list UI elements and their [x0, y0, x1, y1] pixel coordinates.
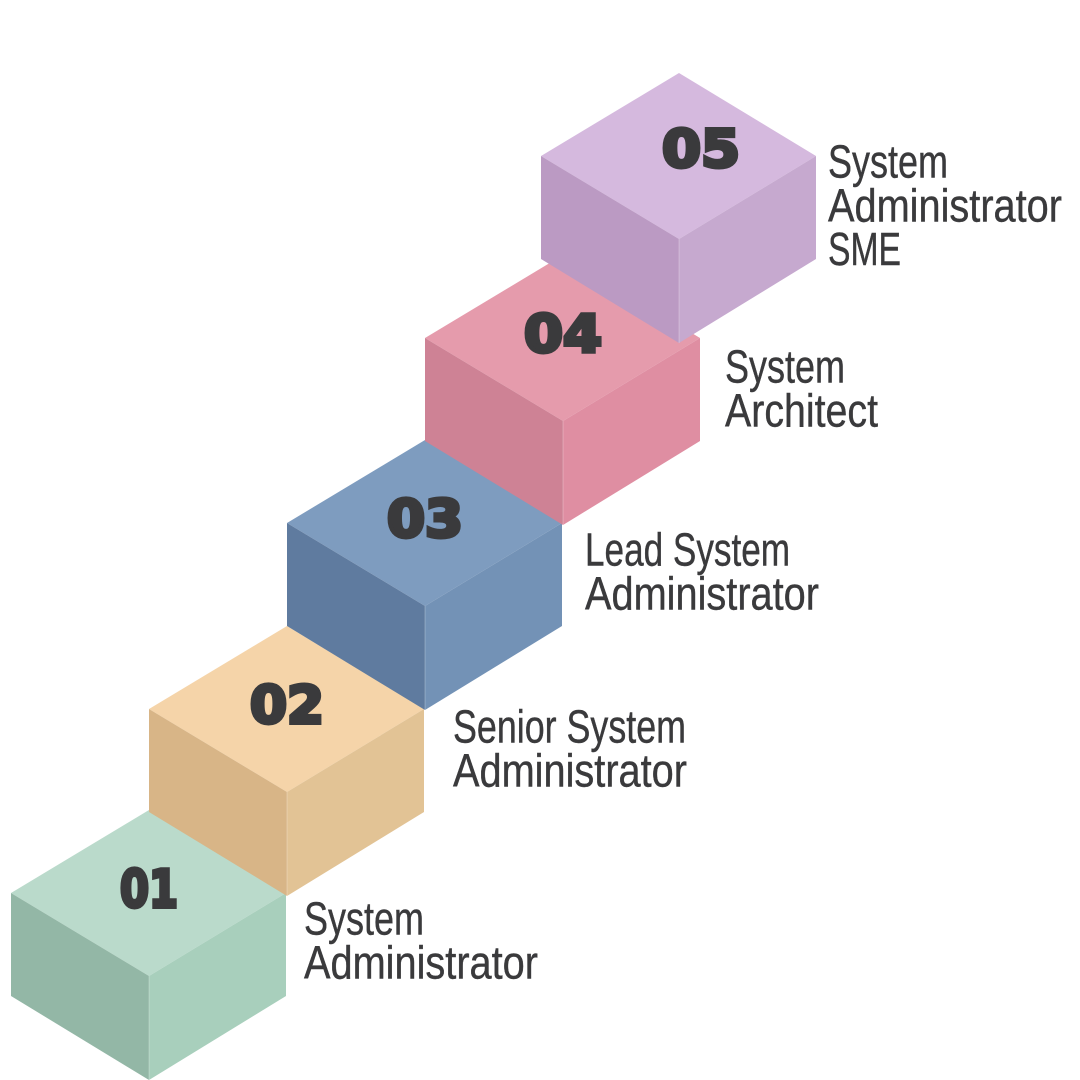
number 01: 01 [120, 860, 178, 920]
step 03: blue cube [287, 440, 562, 710]
label: Lead System Administrator: Lead System [585, 524, 790, 576]
step 05: purple cube [541, 73, 816, 343]
label: System Architect [725, 340, 878, 436]
step 01: green cube [11, 810, 286, 1080]
label: System Administrator [304, 892, 538, 988]
label: System Architect: System [725, 340, 845, 392]
number 04: 04 [524, 305, 602, 365]
label: Senior System Administrator: Senior System [453, 700, 686, 752]
number 03: 03 [387, 490, 463, 550]
step 02: orange cube [149, 626, 424, 896]
label: Lead System Administrator [585, 524, 819, 620]
label: Senior System Administrator [453, 700, 687, 796]
label: System Architect: Architect [725, 384, 878, 436]
label: System Administrator: System [304, 892, 424, 944]
label: Senior System Administrator: Administrator [453, 744, 687, 796]
step 04: pink cube [425, 255, 700, 525]
label: Lead System Administrator: Administrator [585, 568, 819, 620]
label: System Administrator SME [828, 136, 1062, 275]
label: System Administrator SME: System [828, 136, 948, 188]
label: System Administrator SME: SME [828, 223, 901, 275]
number 05: 05 [662, 120, 740, 180]
label: System Administrator: Administrator [304, 936, 538, 988]
number 02: 02 [250, 676, 324, 736]
